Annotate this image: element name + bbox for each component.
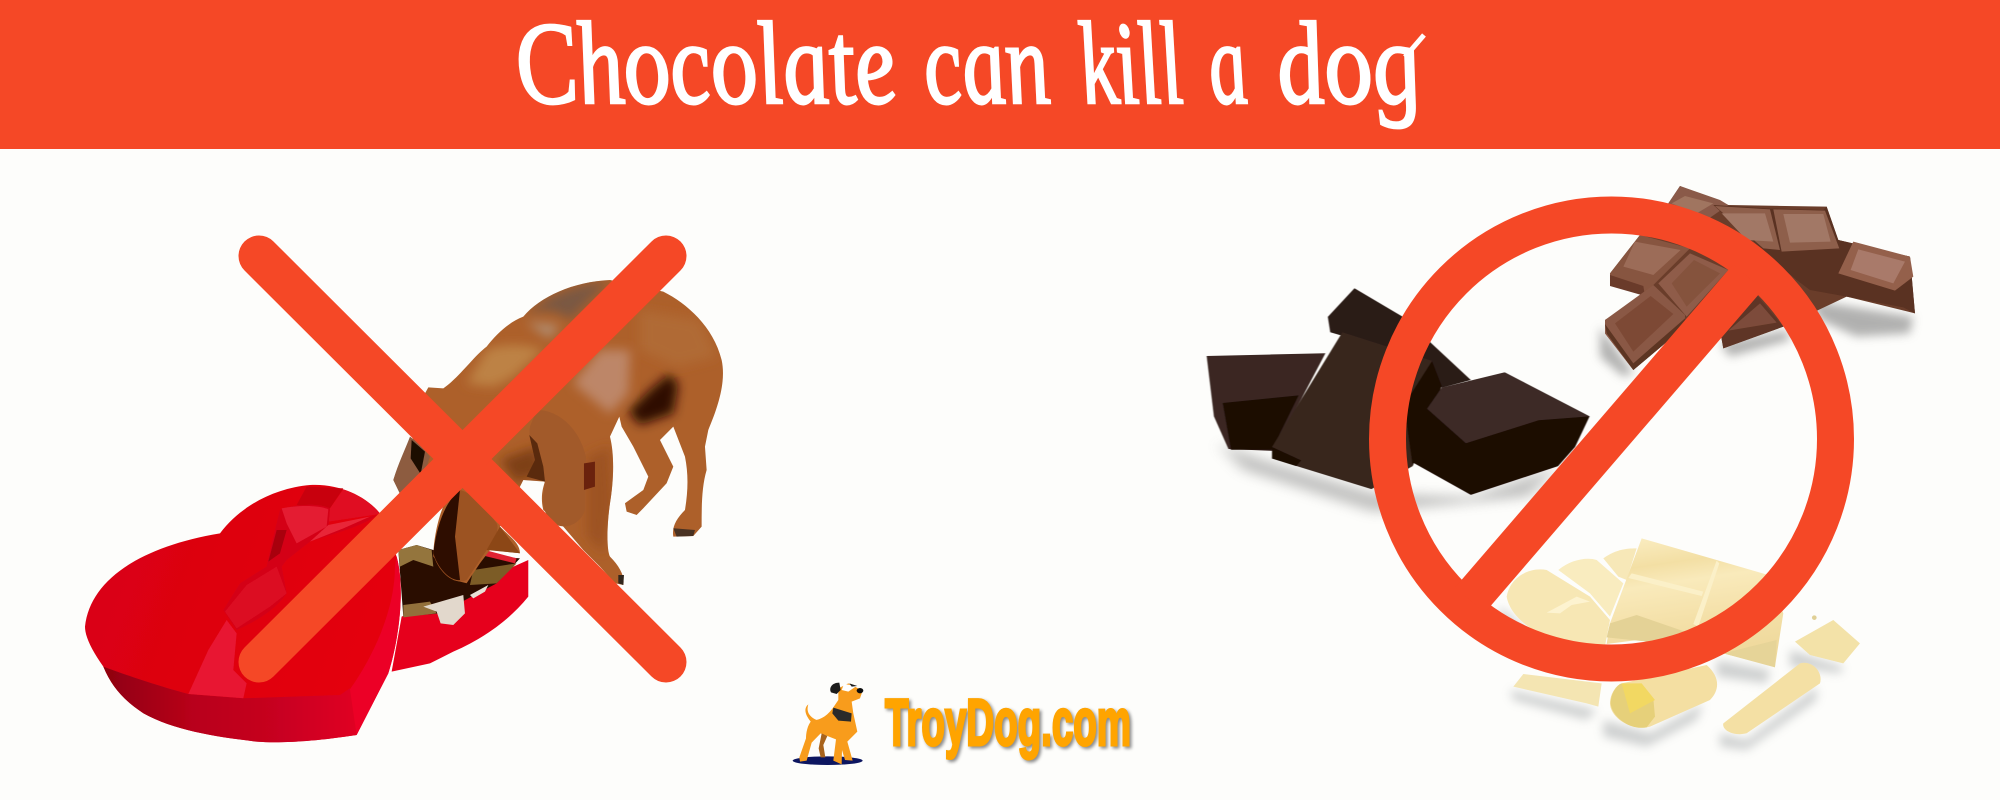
logo: TroyDog.com [793,683,1131,765]
panel: chocolate varieties [1207,186,1915,750]
title text: dog [1263,0,1430,129]
panel: dog eating from heart chocolate box [85,280,723,742]
dog [393,280,723,585]
heart box tray with chocolates [392,545,528,672]
title text: Chocolate [502,0,906,129]
icon: prohibition sign [1388,215,1836,663]
title banner [0,0,2000,149]
dog fur shading [467,281,717,553]
heart box lid [85,485,401,742]
milk chocolate [1600,186,1915,377]
title text: kill [1067,0,1193,129]
dog left ear [393,437,430,494]
title text [502,0,1430,129]
title g ear stroke [1405,35,1424,57]
title text: a [1195,0,1257,129]
title text: can [910,0,1059,129]
dark chocolate [1207,288,1590,512]
dog snout and paw [433,490,695,585]
logo text: TroyDog.com [885,685,1131,759]
icon: orange dog mascot [793,683,863,765]
white chocolate [1500,538,1860,750]
icon: red X over dog [259,256,666,662]
dog ear [527,410,595,526]
